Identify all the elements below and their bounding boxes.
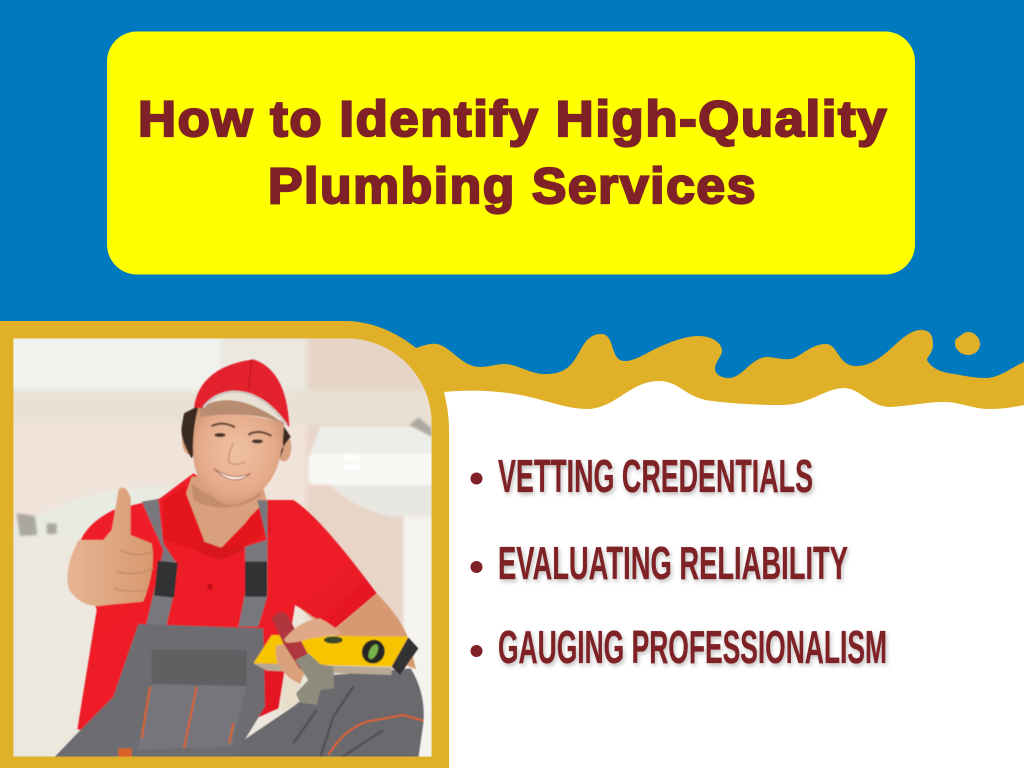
title line 2: Plumbing Services [268, 158, 757, 214]
red cap [194, 359, 289, 427]
bullet: vetting credentials [470, 450, 813, 502]
ears [182, 424, 195, 454]
thumbs-up arm [67, 488, 153, 606]
sink [308, 427, 440, 763]
right leg of overalls [217, 668, 424, 758]
collar [163, 487, 204, 552]
forearm [296, 593, 416, 669]
photo: plumber giving thumbs up [7, 333, 440, 763]
bullet list [470, 450, 887, 673]
hair [181, 405, 200, 458]
red polo shirt [77, 473, 377, 743]
bathroom wall [7, 333, 440, 763]
face [193, 407, 284, 505]
gold paint wave [0, 321, 1024, 768]
gold paint droplet [955, 332, 980, 355]
neck [185, 477, 267, 548]
bullet: vetting credentials: VETTING CREDENTIALS [498, 450, 813, 502]
adjustable wrench [272, 612, 309, 669]
spirit level [253, 635, 408, 667]
title panel [107, 32, 915, 274]
title line 1: How to Identify High-Quality [138, 91, 888, 147]
plumber figure [53, 359, 424, 758]
bullet: evaluating reliability [470, 537, 848, 589]
overall straps [142, 499, 177, 625]
palm [276, 643, 308, 684]
white content area [444, 381, 1024, 768]
gripping fingers [284, 618, 342, 643]
strap buckles [154, 561, 178, 598]
taps [17, 417, 432, 536]
overalls bib [53, 624, 265, 758]
